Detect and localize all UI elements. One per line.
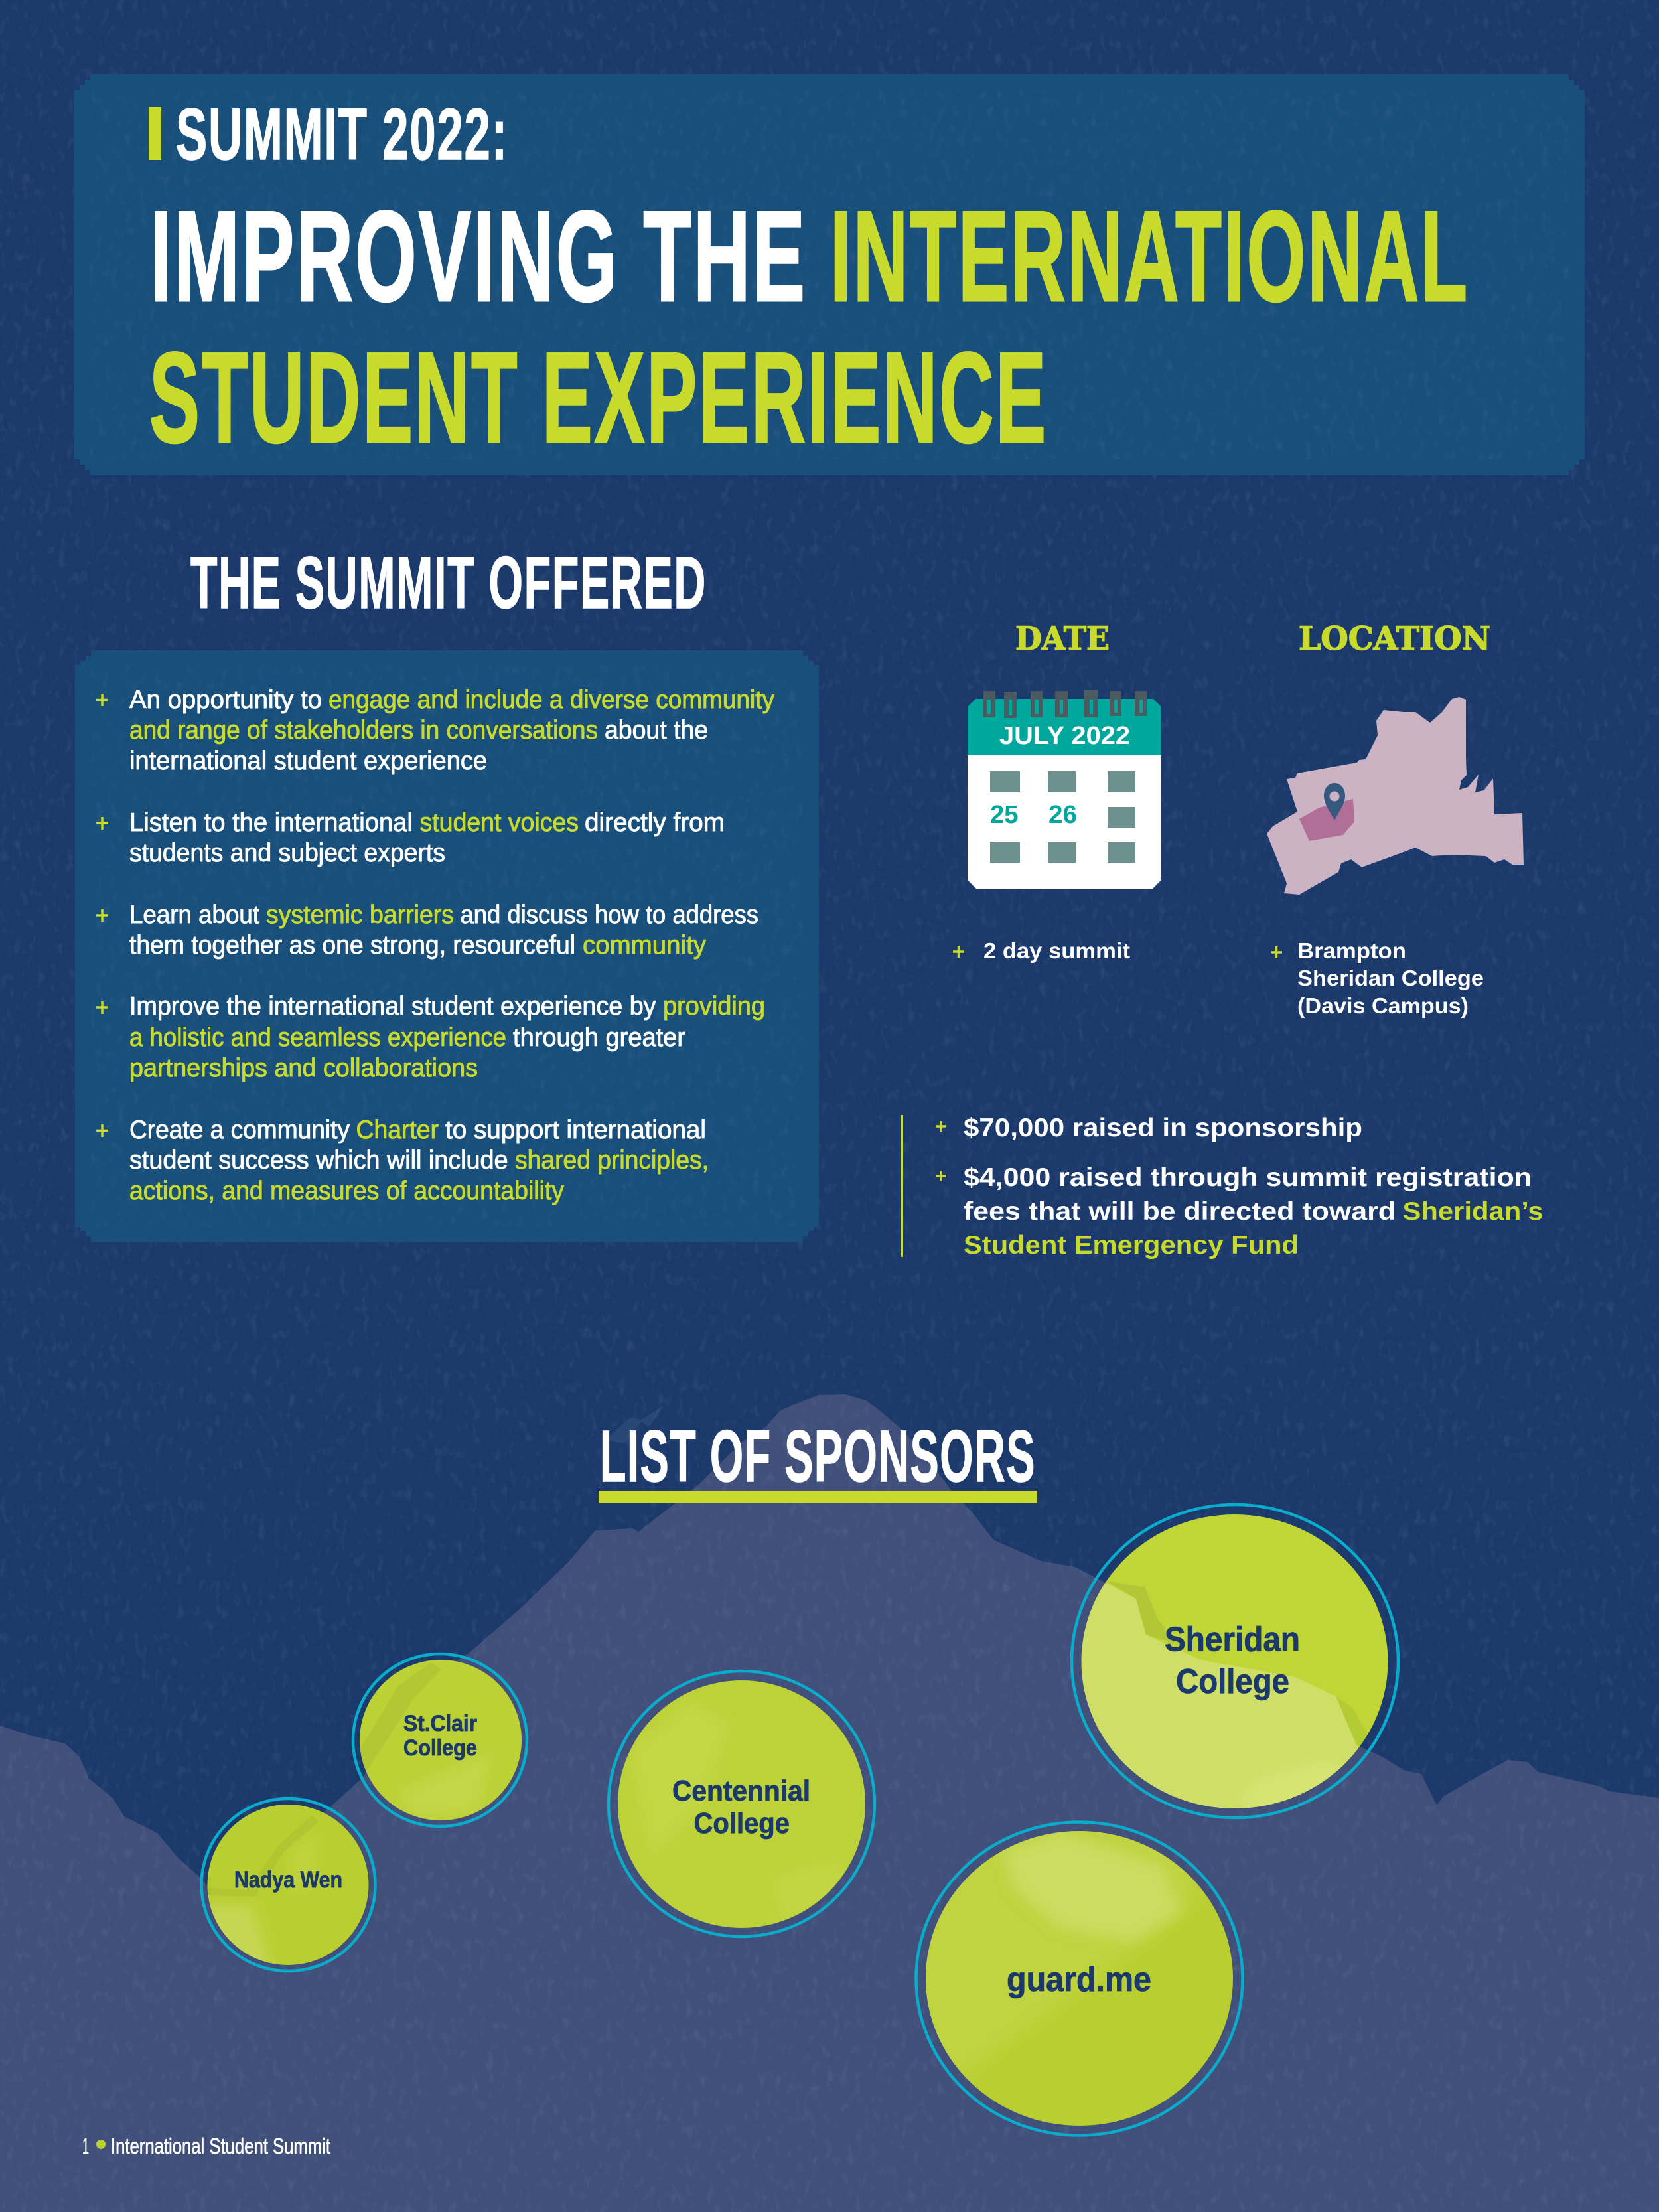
list item 2: student voices (419, 808, 579, 837)
eyebrow title: SUMMIT 2022: (176, 94, 508, 175)
list item 4: Improve the international student experience by (129, 992, 656, 1021)
location detail (1271, 938, 1484, 1018)
fundraising stats: $70,000 raised in sponsorship (964, 1114, 1362, 1142)
list item 2 (96, 808, 725, 867)
sponsor: St.Clair College (353, 1654, 527, 1826)
list item 2: students and subject experts (129, 839, 445, 867)
heading: the summit offered: THE SUMMIT OFFERED (190, 542, 707, 624)
fundraising stats (901, 1114, 1544, 1260)
mountain silhouette (0, 1394, 1659, 2212)
sponsor: Sheridan College (1062, 1505, 1407, 1832)
list item 5: shared principles, (515, 1146, 709, 1175)
sponsor: guard.me: guard.me (1007, 1960, 1151, 1999)
footer: International Student Summit (111, 2134, 330, 2158)
main title: IMPROVING THE (150, 184, 807, 329)
date detail: 2 day summit (983, 938, 1130, 963)
sponsor: Nadya Wen: Nadya Wen (234, 1867, 342, 1893)
list item 2: Listen to the international (129, 808, 413, 837)
heading: list of sponsors: LIST OF SPONSORS (600, 1416, 1036, 1497)
list item 1: An opportunity to (129, 686, 322, 714)
list item 5 (96, 1116, 709, 1205)
list item 1: about the (605, 716, 708, 745)
list item 3: and discuss how to address (461, 901, 758, 929)
list item 5: to support international (445, 1116, 706, 1144)
icon: region map with location pin (1267, 697, 1524, 895)
sponsor: Sheridan College: College (1176, 1662, 1289, 1701)
sponsor: Centennial College (609, 1671, 875, 1937)
footer: 1 (82, 2134, 89, 2158)
list item 5: Create a community (129, 1116, 350, 1144)
heading: location: LOCATION (1299, 619, 1490, 658)
list item 1: international student experience (129, 747, 487, 775)
sponsor: Centennial College: College (694, 1807, 790, 1840)
sponsor: guard.me (916, 1822, 1242, 2136)
list item 4: a holistic and seamless experience (129, 1023, 506, 1052)
list item 3: systemic barriers (266, 901, 454, 929)
list item 5: Charter (356, 1116, 439, 1144)
list item 3: them together as one strong, resourceful (129, 931, 575, 960)
list item 4: partnerships and collaborations (129, 1054, 478, 1082)
main title (149, 184, 1469, 470)
list item 1 (96, 686, 774, 775)
main title: STUDENT EXPERIENCE (149, 326, 1048, 470)
sponsor: Nadya Wen (199, 1799, 376, 1971)
location detail: Brampton (1297, 938, 1406, 963)
icon: calendar: 25 (990, 801, 1018, 829)
location detail: (Davis Campus) (1297, 994, 1469, 1018)
accent bar (149, 107, 161, 160)
panel: summit offerings list (75, 650, 819, 1242)
icon: calendar: JULY 2022 (999, 722, 1130, 750)
header panel (74, 74, 1585, 475)
heading: list of sponsors (599, 1416, 1037, 1503)
list item 5: actions, and measures of accountability (129, 1177, 564, 1205)
list item 3: community (583, 931, 706, 960)
sponsor: St.Clair College: St.Clair (403, 1711, 477, 1736)
sponsor: St.Clair College: College (403, 1735, 477, 1761)
list item 3: Learn about (129, 901, 259, 929)
list item 1: and range of stakeholders in conversations (129, 716, 598, 745)
sponsor: Centennial College: Centennial (672, 1775, 810, 1807)
fundraising stats: fees that will be directed toward (964, 1197, 1396, 1226)
list item 4: providing (663, 992, 765, 1021)
list item 1: engage and include a diverse community (328, 686, 774, 714)
sponsor: Sheridan College: Sheridan (1165, 1621, 1300, 1659)
icon: calendar: 26 (1048, 801, 1077, 829)
list item 3 (96, 901, 758, 960)
location detail: Sheridan College (1297, 966, 1484, 990)
icon: calendar (968, 690, 1161, 889)
list item 2: directly from (585, 808, 725, 837)
fundraising stats: Student Emergency Fund (964, 1231, 1299, 1260)
fundraising stats: $4,000 raised through summit registration (964, 1163, 1532, 1192)
fundraising stats: Sheridan’s (1403, 1197, 1544, 1226)
heading: date: DATE (1015, 619, 1110, 658)
list item 4: through greater (513, 1023, 685, 1052)
list item 5: student success which will include (129, 1146, 508, 1175)
list item 4 (96, 992, 765, 1082)
